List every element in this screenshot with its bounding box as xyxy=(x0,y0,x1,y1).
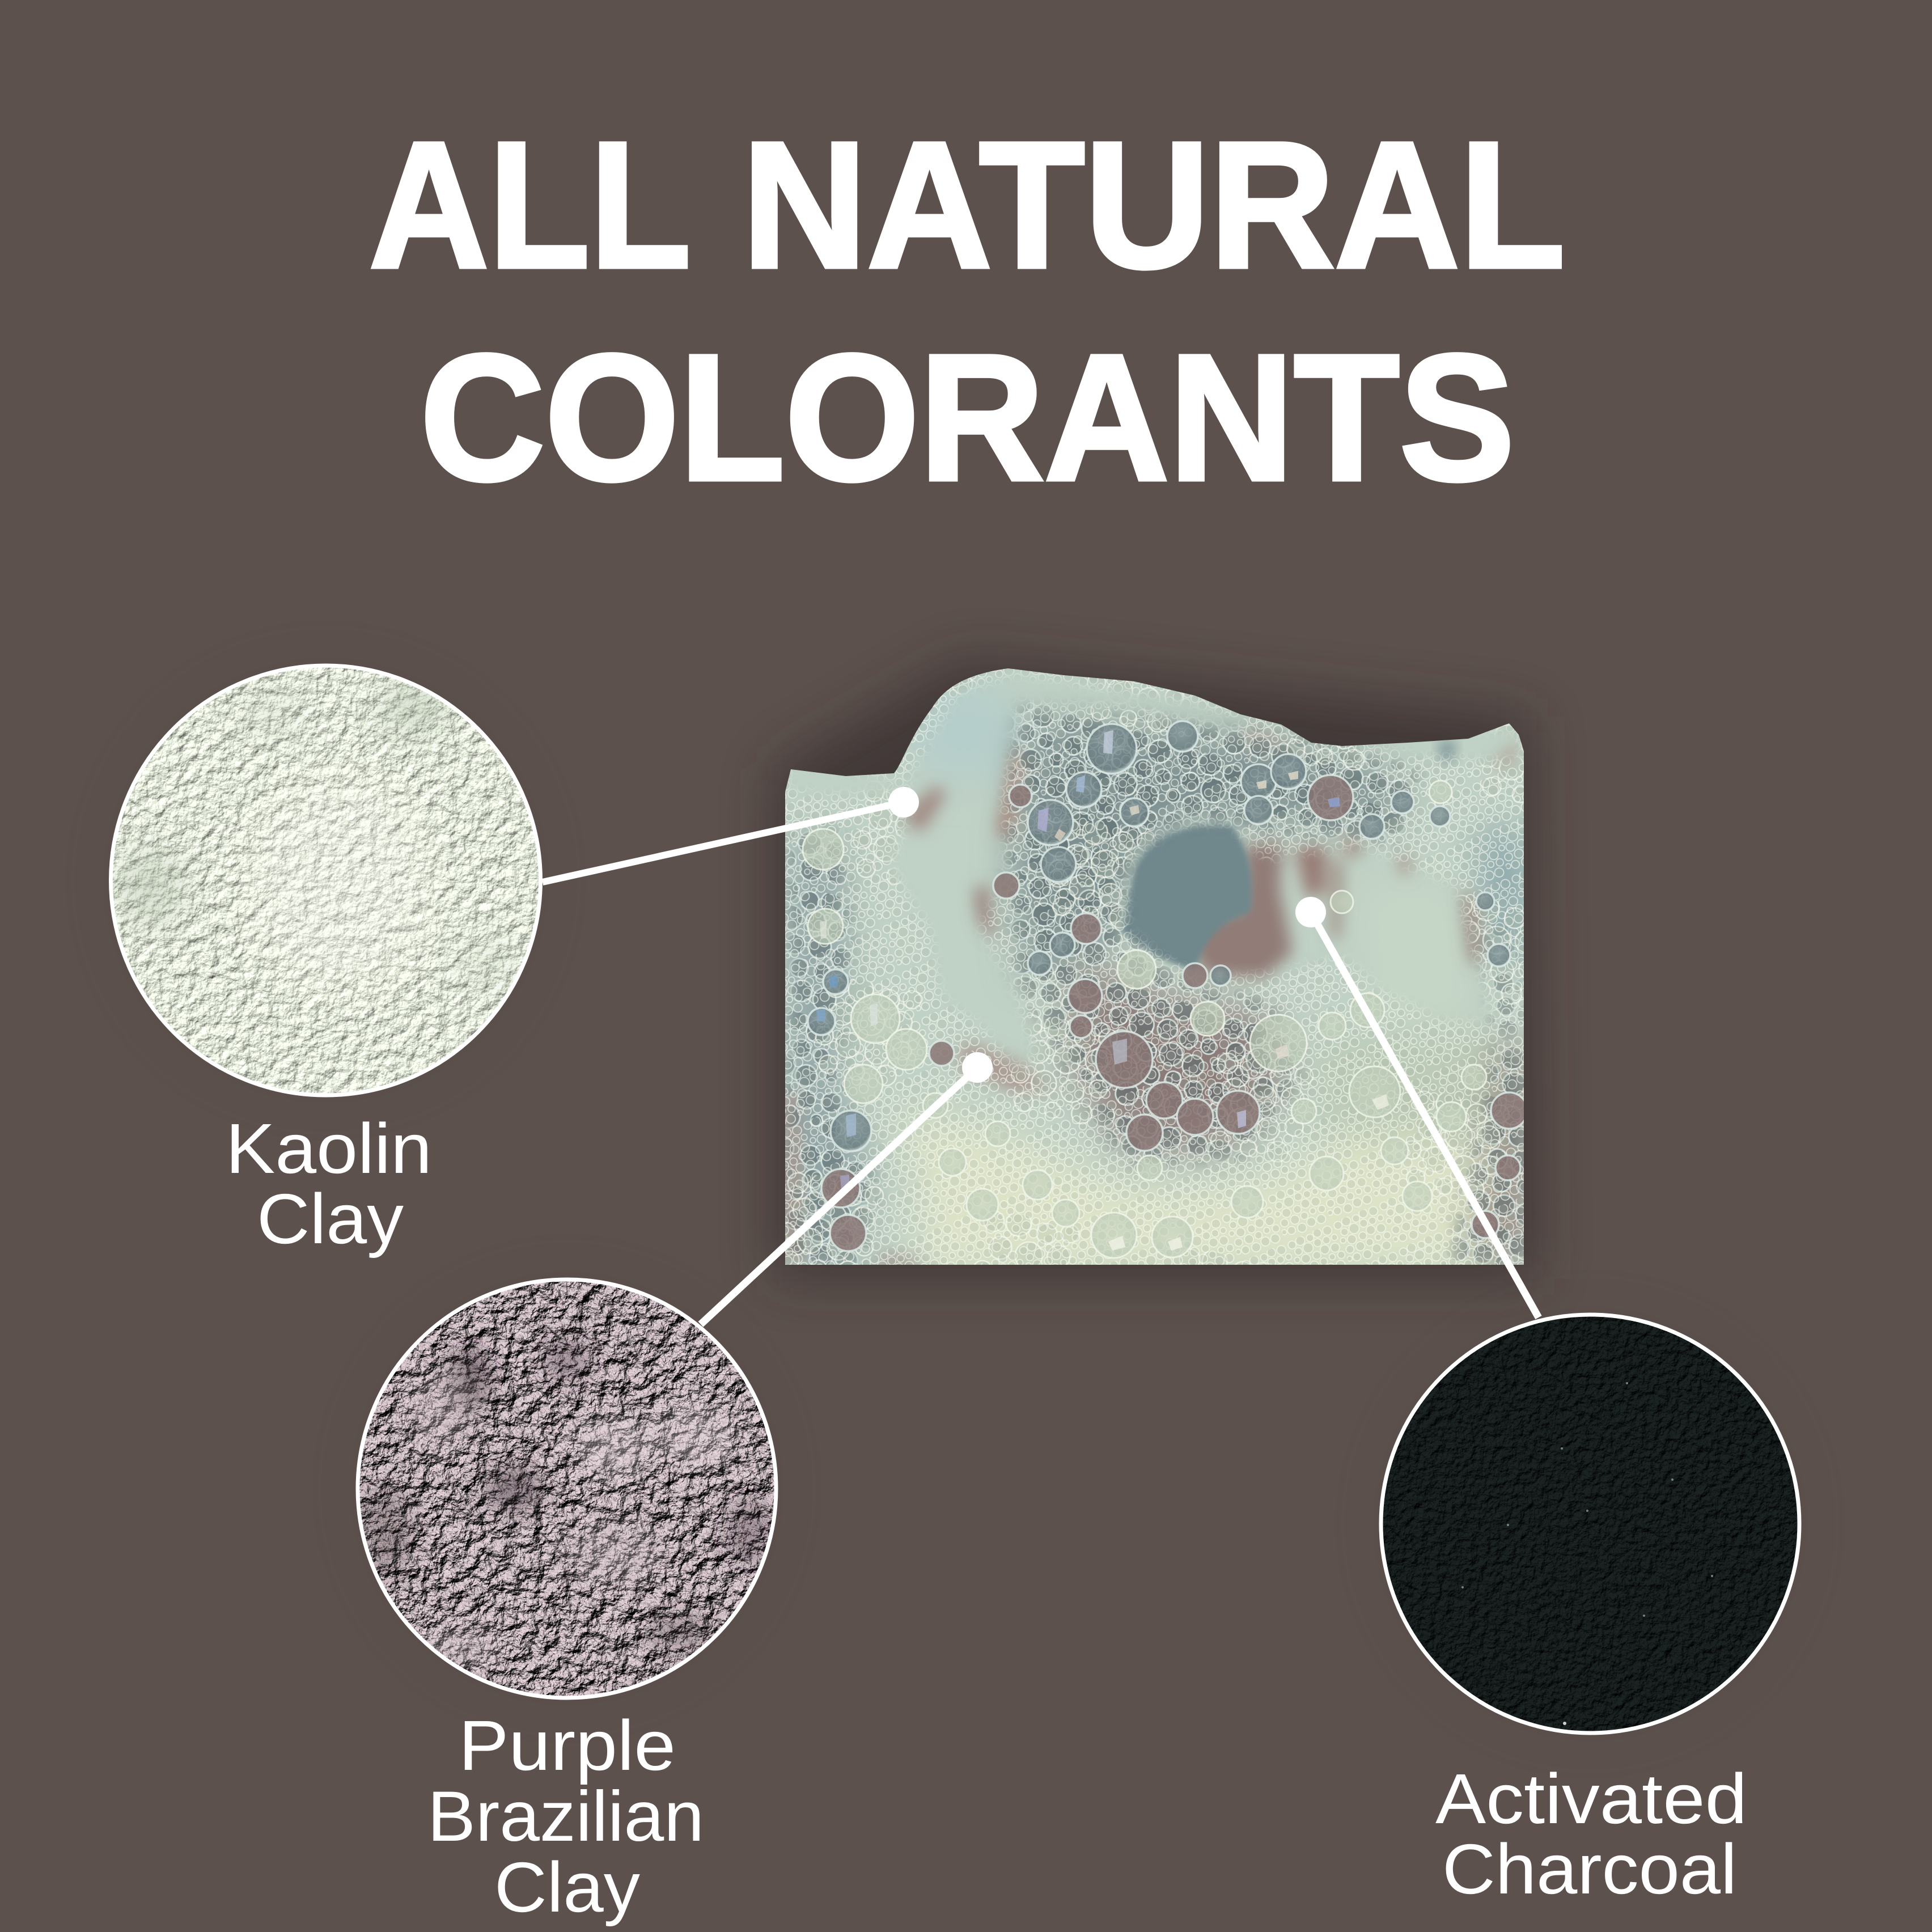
soap colour zones xyxy=(785,680,1525,1270)
iridescent bubble glints xyxy=(816,730,1389,1251)
callout line: kaolin to soap xyxy=(543,787,919,882)
callout line: charcoal to soap xyxy=(1295,897,1539,1317)
callout line: purple clay to soap xyxy=(701,1052,993,1324)
title: COLORANTS xyxy=(420,317,1515,518)
dark foam ring xyxy=(785,663,1528,1270)
large foam bubbles xyxy=(803,721,1527,1258)
soft shadows behind soap and swatches xyxy=(102,656,1808,1742)
title: ALL xyxy=(369,105,691,306)
label: purple brazilian clay: Brazilian xyxy=(427,1777,704,1856)
label: activated charcoal: Activated xyxy=(1435,1760,1747,1838)
title xyxy=(369,105,1565,518)
label: activated charcoal xyxy=(1435,1760,1747,1909)
label: purple brazilian clay xyxy=(427,1706,704,1927)
swatch: purple brazilian clay xyxy=(354,1276,779,1701)
label: activated charcoal: Charcoal xyxy=(1442,1830,1737,1909)
label: purple brazilian clay: Clay xyxy=(494,1848,641,1927)
soap bar photo with foam xyxy=(782,663,1528,1270)
label: purple brazilian clay: Purple xyxy=(459,1706,676,1785)
title: NATURAL xyxy=(742,105,1565,306)
streaks of mauve and teal xyxy=(785,731,1522,1267)
swatch: activated charcoal xyxy=(1378,1311,1803,1736)
label: kaolin clay: Clay xyxy=(257,1180,404,1259)
pale foam xyxy=(785,663,1528,1270)
label: kaolin clay: Kaolin xyxy=(226,1109,432,1188)
label: kaolin clay xyxy=(226,1109,432,1259)
swatch: kaolin clay xyxy=(108,663,544,1100)
